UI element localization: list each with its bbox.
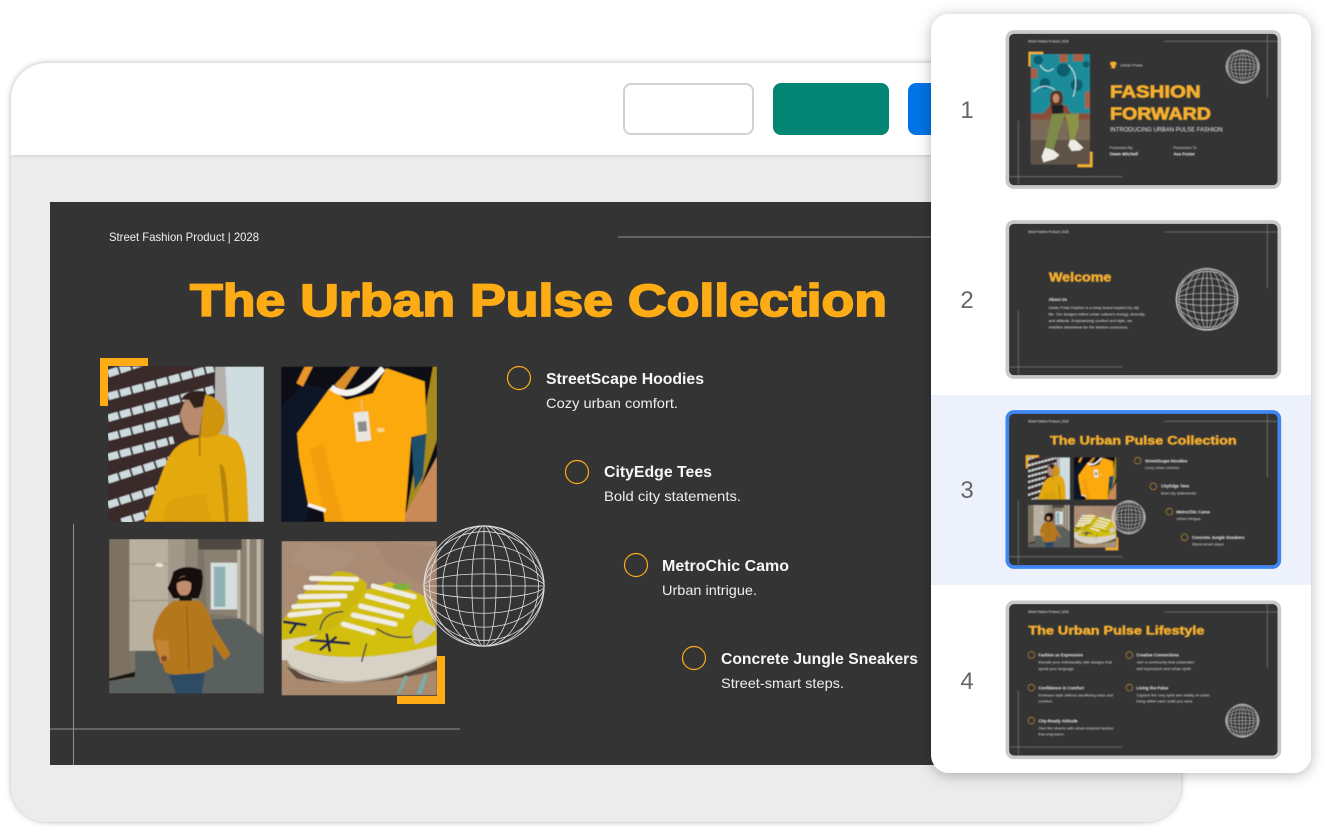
slide number 2: 2 bbox=[960, 287, 974, 314]
thumbnail 4: The Urban Pulse Lifestyle: Fashion as Expression bbox=[1038, 653, 1083, 658]
thumbnail 3: The Urban Pulse Collection (selected): Street Fashion Product | 2028 bbox=[1028, 420, 1069, 424]
list item: StreetScape Hoodies: Cozy urban comfort. bbox=[546, 395, 678, 411]
bracket: bottom right bbox=[397, 656, 445, 704]
thumbnail 3: The Urban Pulse Collection (selected) bbox=[1007, 412, 1279, 567]
thumbnail 3: The Urban Pulse Collection (selected): Concrete Jungle Sneakers bbox=[1192, 535, 1245, 540]
thumbnail 4: The Urban Pulse Lifestyle: Creative Connections bbox=[1136, 653, 1180, 658]
list item: MetroChic Camo: MetroChic Camo bbox=[662, 558, 789, 575]
photo: t-shirt bbox=[281, 366, 437, 522]
thumbnail 3: The Urban Pulse Collection (selected): Urban intrigue. bbox=[1176, 517, 1202, 521]
icon: wire globe bbox=[424, 526, 544, 646]
thumbnail 3: The Urban Pulse Collection (selected): The Urban Pulse Collection bbox=[1050, 433, 1237, 447]
list item: MetroChic Camo: Urban intrigue. bbox=[662, 582, 757, 598]
thumbnail 3: The Urban Pulse Collection (selected): Cozy urban comfort. bbox=[1145, 466, 1180, 470]
thumbnail 3: The Urban Pulse Collection (selected): Street-smart steps. bbox=[1192, 543, 1225, 547]
thumbnail 3: The Urban Pulse Collection (selected): MetroChic Camo bbox=[1176, 509, 1210, 514]
list item: CityEdge Tees: CityEdge Tees bbox=[604, 464, 712, 481]
thumbnail 1: Fashion Forward bbox=[1007, 32, 1279, 187]
thumbnail 1: Fashion Forward: Urban Pulse bbox=[1120, 62, 1143, 67]
slide number 3: 3 bbox=[960, 477, 974, 504]
button: blue bbox=[908, 83, 931, 135]
thumbnail 4: The Urban Pulse Lifestyle: The Urban Pulse Lifestyle bbox=[1028, 623, 1204, 637]
list item: CityEdge Tees: Bold city statements. bbox=[604, 488, 741, 504]
thumbnail 4: The Urban Pulse Lifestyle: living within each outfit you wear. bbox=[1136, 700, 1193, 704]
thumbnail 1: Fashion Forward: FORWARD bbox=[1110, 103, 1211, 123]
slide number 4: 4 bbox=[960, 668, 974, 695]
list item: CityEdge Tees bbox=[566, 460, 741, 504]
thumbnail 1: Fashion Forward: Owen Mitchell bbox=[1110, 152, 1138, 157]
vertical rule bbox=[73, 524, 74, 765]
thumbnail 4: The Urban Pulse Lifestyle: Elevate your individuality with designs that bbox=[1038, 660, 1112, 664]
thumbnail 1: Fashion Forward: Presented By bbox=[1110, 146, 1133, 150]
thumbnail 4: The Urban Pulse Lifestyle: Capture the very spirit and vitality of urban bbox=[1136, 693, 1210, 697]
photo: sneakers bbox=[282, 541, 437, 696]
bottom rule bbox=[50, 728, 460, 730]
thumbnail 2: Welcome: About Us bbox=[1049, 297, 1068, 302]
sidebar panel bbox=[931, 14, 1311, 773]
thumbnail 2: Welcome: life. Our designs reflect urban culture's energy, diversity, bbox=[1049, 313, 1145, 317]
thumbnail 4: The Urban Pulse Lifestyle: Street Fashion Product | 2028 bbox=[1028, 610, 1069, 614]
list item: Concrete Jungle Sneakers: Concrete Jungle Sneakers bbox=[721, 651, 918, 668]
thumbnail 3: The Urban Pulse Collection (selected): Bold city statements. bbox=[1161, 492, 1197, 496]
list item: StreetScape Hoodies bbox=[508, 366, 704, 411]
thumbnail 4: The Urban Pulse Lifestyle: Own the streets with urban-inspired fashion bbox=[1038, 726, 1114, 730]
photo: hoodie bbox=[108, 356, 264, 522]
list item: StreetScape Hoodies: StreetScape Hoodies bbox=[546, 371, 704, 388]
thumbnail 4: The Urban Pulse Lifestyle: Confidence in Comfort bbox=[1038, 686, 1085, 691]
thumbnail 4: The Urban Pulse Lifestyle: Embrace style without sacrificing ease and bbox=[1038, 693, 1113, 697]
thumbnail 4: The Urban Pulse Lifestyle: speak your language. bbox=[1038, 667, 1075, 671]
thumbnail 1: Fashion Forward: Ava Foster bbox=[1173, 152, 1195, 157]
thumbnail 2: Welcome: redefine streetwear for the fashion-conscious. bbox=[1049, 326, 1128, 330]
slide background bbox=[50, 202, 934, 765]
bracket: top left bbox=[100, 358, 148, 406]
thumbnail 4: The Urban Pulse Lifestyle: City-Ready Attitude bbox=[1038, 718, 1078, 723]
toolbar bbox=[11, 63, 931, 157]
thumbnail 2: Welcome: Welcome bbox=[1049, 270, 1111, 285]
thumbnail 2: Welcome bbox=[1007, 222, 1279, 377]
list item: MetroChic Camo bbox=[624, 554, 789, 598]
thumbnail 4: The Urban Pulse Lifestyle: comfort. bbox=[1038, 700, 1053, 704]
thumbnail 4: The Urban Pulse Lifestyle: Join a community that celebrates bbox=[1136, 660, 1195, 664]
thumbnail 1: Fashion Forward: FASHION bbox=[1110, 81, 1201, 101]
thumbnail 2: Welcome: Urban Pulse Fashion is a lively brand inspired by city bbox=[1049, 306, 1139, 310]
main slide bbox=[50, 202, 934, 765]
button: green bbox=[773, 83, 889, 135]
thumbnail 4: The Urban Pulse Lifestyle: self-expression and urban spirit. bbox=[1136, 667, 1192, 671]
thumbnail 4: The Urban Pulse Lifestyle: Living the Pulse bbox=[1136, 686, 1169, 691]
selected row highlight bbox=[931, 395, 1311, 585]
header rule bbox=[618, 236, 931, 238]
slide number 1: 1 bbox=[960, 97, 974, 124]
list item: Concrete Jungle Sneakers bbox=[682, 646, 918, 691]
thumbnail 1: Fashion Forward: Presented To bbox=[1173, 146, 1197, 150]
slide title: The Urban Pulse Collection bbox=[190, 275, 887, 326]
thumbnail 2: Welcome: and attitude. Emphasizing comfort and style, we bbox=[1049, 319, 1132, 323]
thumbnail 1: Fashion Forward: Street Fashion Product | 2028 bbox=[1028, 40, 1069, 44]
thumbnail 2: Welcome: Street Fashion Product | 2028 bbox=[1028, 230, 1069, 234]
photo: puffer jacket bbox=[109, 539, 264, 694]
button: outline bbox=[624, 84, 753, 134]
thumbnail 3: The Urban Pulse Collection (selected): StreetScape Hoodies bbox=[1145, 458, 1188, 463]
thumbnail 4: The Urban Pulse Lifestyle bbox=[1007, 602, 1279, 757]
thumbnail 4: The Urban Pulse Lifestyle: that empowers. bbox=[1038, 733, 1065, 737]
list item: Concrete Jungle Sneakers: Street-smart steps. bbox=[721, 675, 844, 691]
thumbnail 1: Fashion Forward: INTRODUCING URBAN PULSE FASHION bbox=[1110, 127, 1223, 134]
thumbnail 3: The Urban Pulse Collection (selected): CityEdge Tees bbox=[1161, 484, 1190, 489]
slide header text: Street Fashion Product | 2028 bbox=[109, 231, 259, 244]
